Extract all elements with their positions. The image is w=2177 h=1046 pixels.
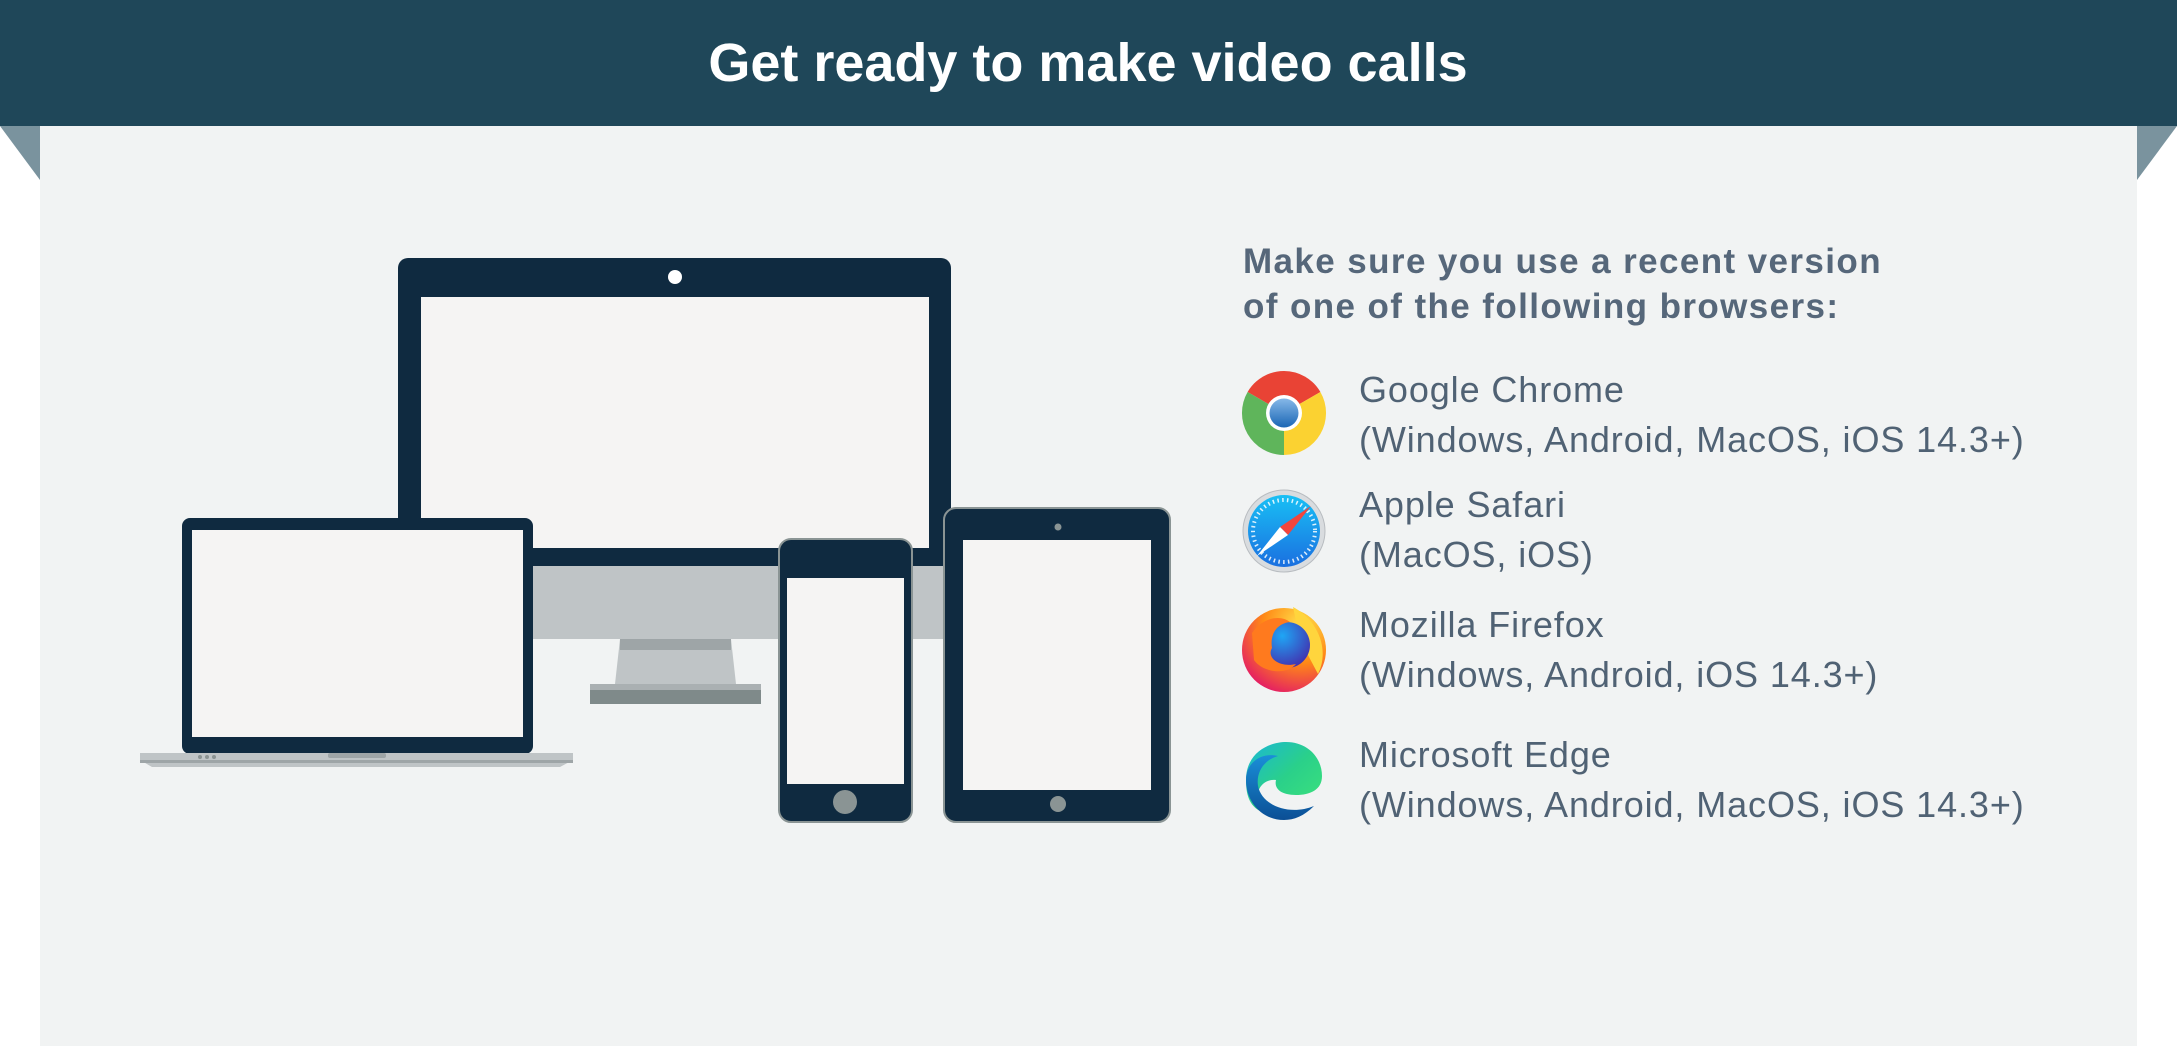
right ribbon fold — [2137, 126, 2177, 180]
intro heading: of one of the following browsers: — [1243, 287, 1839, 326]
label: safari: Apple Safari — [1359, 484, 1566, 525]
smartphone — [779, 539, 912, 822]
devices illustration — [140, 258, 1170, 822]
browser: safari — [1243, 484, 1594, 575]
browser: chrome — [1242, 369, 2025, 460]
label: edge: Microsoft Edge — [1359, 734, 1612, 775]
left ribbon fold — [0, 126, 40, 180]
monitor — [398, 258, 951, 704]
label: safari: (MacOS, iOS) — [1359, 534, 1594, 575]
icon: safari — [1243, 490, 1325, 572]
icon: chrome — [1242, 371, 1326, 455]
tablet — [944, 508, 1170, 822]
label: edge: (Windows, Android, MacOS, iOS 14.3+) — [1359, 784, 2025, 825]
browser: firefox — [1242, 604, 1878, 695]
icon: firefox — [1242, 607, 1326, 692]
label: chrome: (Windows, Android, MacOS, iOS 14.3+) — [1359, 419, 2025, 460]
header banner — [0, 0, 2177, 126]
intro heading: Make sure you use a recent version — [1243, 242, 1882, 281]
title: Get ready to make video calls — [708, 33, 1468, 93]
browser: edge — [1246, 734, 2025, 825]
label: firefox: Mozilla Firefox — [1359, 604, 1605, 645]
label: firefox: (Windows, Android, iOS 14.3+) — [1359, 654, 1878, 695]
laptop — [140, 518, 573, 767]
label: chrome: Google Chrome — [1359, 369, 1625, 410]
icon: edge — [1246, 742, 1322, 820]
